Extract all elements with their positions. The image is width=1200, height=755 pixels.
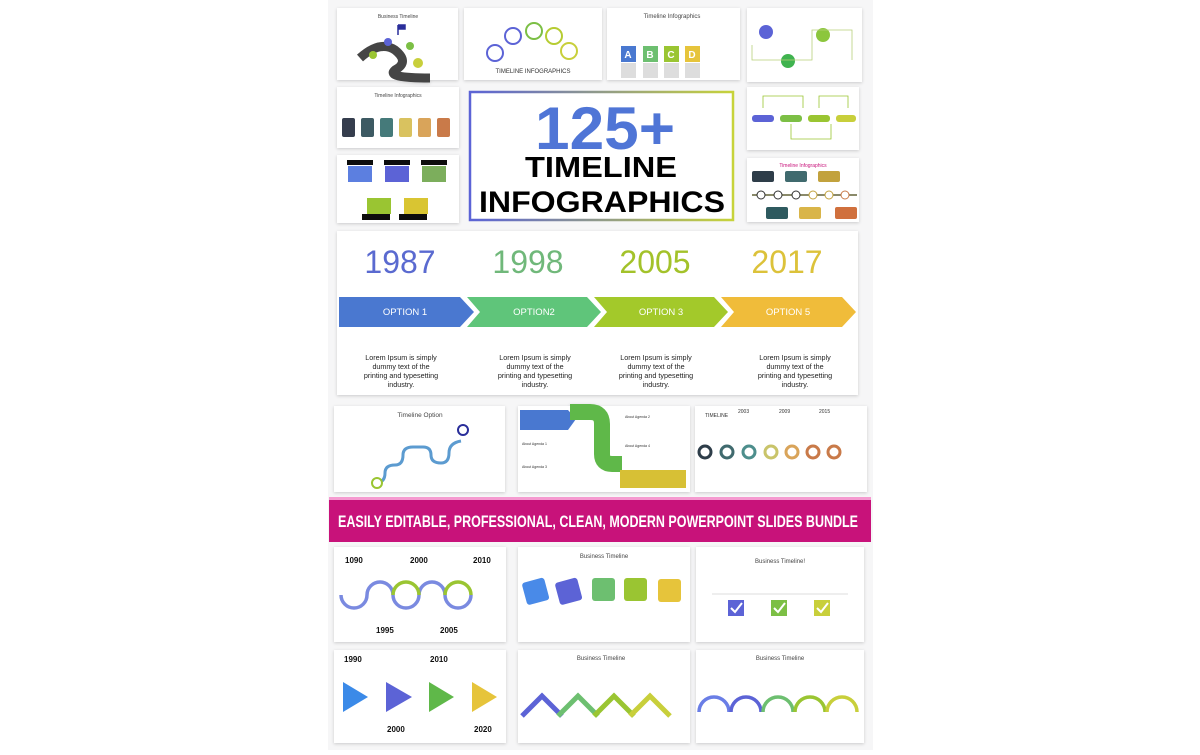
card: wave infographics: [695, 406, 867, 492]
card: timeline option steps: Timeline Option: [397, 412, 443, 419]
card: triangle years: 2000: [387, 725, 405, 734]
card: business timeline arcs: [696, 650, 864, 743]
card: agenda arrows: About Agenda 1: [522, 442, 547, 446]
descriptions: printing and typesetting: [364, 371, 438, 380]
card: business timeline zigzag: Business Timeline: [577, 656, 626, 662]
descriptions: dummy text of the: [372, 362, 430, 371]
title: INFOGRAPHICS: INFOGRAPHICS: [479, 186, 725, 219]
title box: [470, 92, 733, 220]
card: flow right 1: [747, 87, 859, 150]
years: 2017: [751, 244, 823, 280]
card: wave infographics: 2015: [819, 409, 830, 415]
card: wave years: 1995: [376, 626, 394, 635]
card: business timeline zigzag: [518, 650, 690, 743]
descriptions: Lorem Ipsum is simply: [620, 353, 692, 362]
card: triangle years: [334, 650, 506, 743]
card: wave years: 2000: [410, 556, 428, 565]
years: 2005: [619, 244, 691, 280]
card: flow right 2: [747, 158, 859, 222]
descriptions: Lorem Ipsum is simply: [365, 353, 437, 362]
card: business timeline tiles: [518, 547, 690, 642]
descriptions: printing and typesetting: [619, 371, 693, 380]
card: circle path: [747, 8, 862, 82]
descriptions: dummy text of the: [506, 362, 564, 371]
arrows: [339, 297, 856, 327]
title: 125+: 125+: [535, 95, 675, 162]
card: wave infographics: TIMELINE: [705, 413, 729, 419]
descriptions: industry.: [388, 380, 414, 389]
descriptions: industry.: [643, 380, 669, 389]
descriptions: printing and typesetting: [498, 371, 572, 380]
card: steps: [337, 155, 459, 223]
panel: main year timeline: [337, 231, 858, 395]
card: wave infographics: 2009: [779, 409, 790, 415]
card: business timeline road: [337, 8, 458, 80]
years: [364, 244, 823, 280]
descriptions: dummy text of the: [766, 362, 824, 371]
card: folder timeline: [337, 87, 459, 148]
card: business timeline checks: Business Timeline!: [755, 559, 805, 565]
card: ABCD timeline infographics: B: [646, 50, 654, 61]
card: agenda arrows: About Agenda 3: [522, 465, 547, 469]
card: agenda arrows: [518, 406, 690, 492]
card: wave years: 2005: [440, 626, 458, 635]
descriptions: dummy text of the: [627, 362, 685, 371]
card: business timeline arcs: Business Timeline: [756, 656, 805, 662]
descriptions: Lorem Ipsum is simply: [499, 353, 571, 362]
card: ABCD timeline infographics: D: [688, 50, 696, 61]
card: agenda arrows: About Agenda 2: [625, 415, 650, 419]
card: ABCD timeline infographics: A: [624, 50, 632, 61]
card: business timeline checks: [696, 547, 864, 642]
card: wave infographics: 2003: [738, 409, 749, 415]
card: circle timeline infographics: [464, 8, 602, 80]
card: timeline option steps: [334, 406, 505, 492]
descriptions: industry.: [522, 380, 548, 389]
card: ABCD timeline infographics: C: [667, 50, 675, 61]
descriptions: printing and typesetting: [758, 371, 832, 380]
card: circle timeline infographics: TIMELINE INFOGRAPHICS: [495, 69, 571, 75]
card: wave years: 2010: [473, 556, 491, 565]
years: 1998: [492, 244, 564, 280]
card: triangle years: 1990: [344, 655, 362, 664]
card: agenda arrows: About Agenda 4: [625, 444, 650, 448]
card: wave years: 1090: [345, 556, 363, 565]
card: triangle years: 2020: [474, 725, 492, 734]
card: ABCD timeline infographics: Timeline Infographics: [644, 14, 700, 20]
card: folder timeline: Timeline Infographics: [374, 93, 422, 99]
descriptions: industry.: [782, 380, 808, 389]
arrows: OPTION2: [513, 307, 555, 318]
card: triangle years: 2010: [430, 655, 448, 664]
banner: [329, 497, 871, 542]
card: business timeline road: Business Timeline: [378, 14, 418, 20]
card: business timeline tiles: Business Timeline: [580, 554, 629, 560]
descriptions: Lorem Ipsum is simply: [759, 353, 831, 362]
years: 1987: [364, 244, 436, 280]
card: flow right 2: Timeline Infographics: [779, 163, 827, 169]
descriptions: [364, 353, 832, 389]
card: wave years: [334, 547, 506, 642]
arrows: OPTION 5: [766, 307, 810, 318]
arrows: OPTION 3: [639, 307, 683, 318]
card: ABCD timeline infographics: [607, 8, 740, 80]
banner: EASILY EDITABLE, PROFESSIONAL, CLEAN, MODERN POWERPOINT SLIDES BUNDLE: [338, 512, 858, 531]
title: TIMELINE: TIMELINE: [525, 152, 677, 184]
arrows: OPTION 1: [383, 307, 427, 318]
